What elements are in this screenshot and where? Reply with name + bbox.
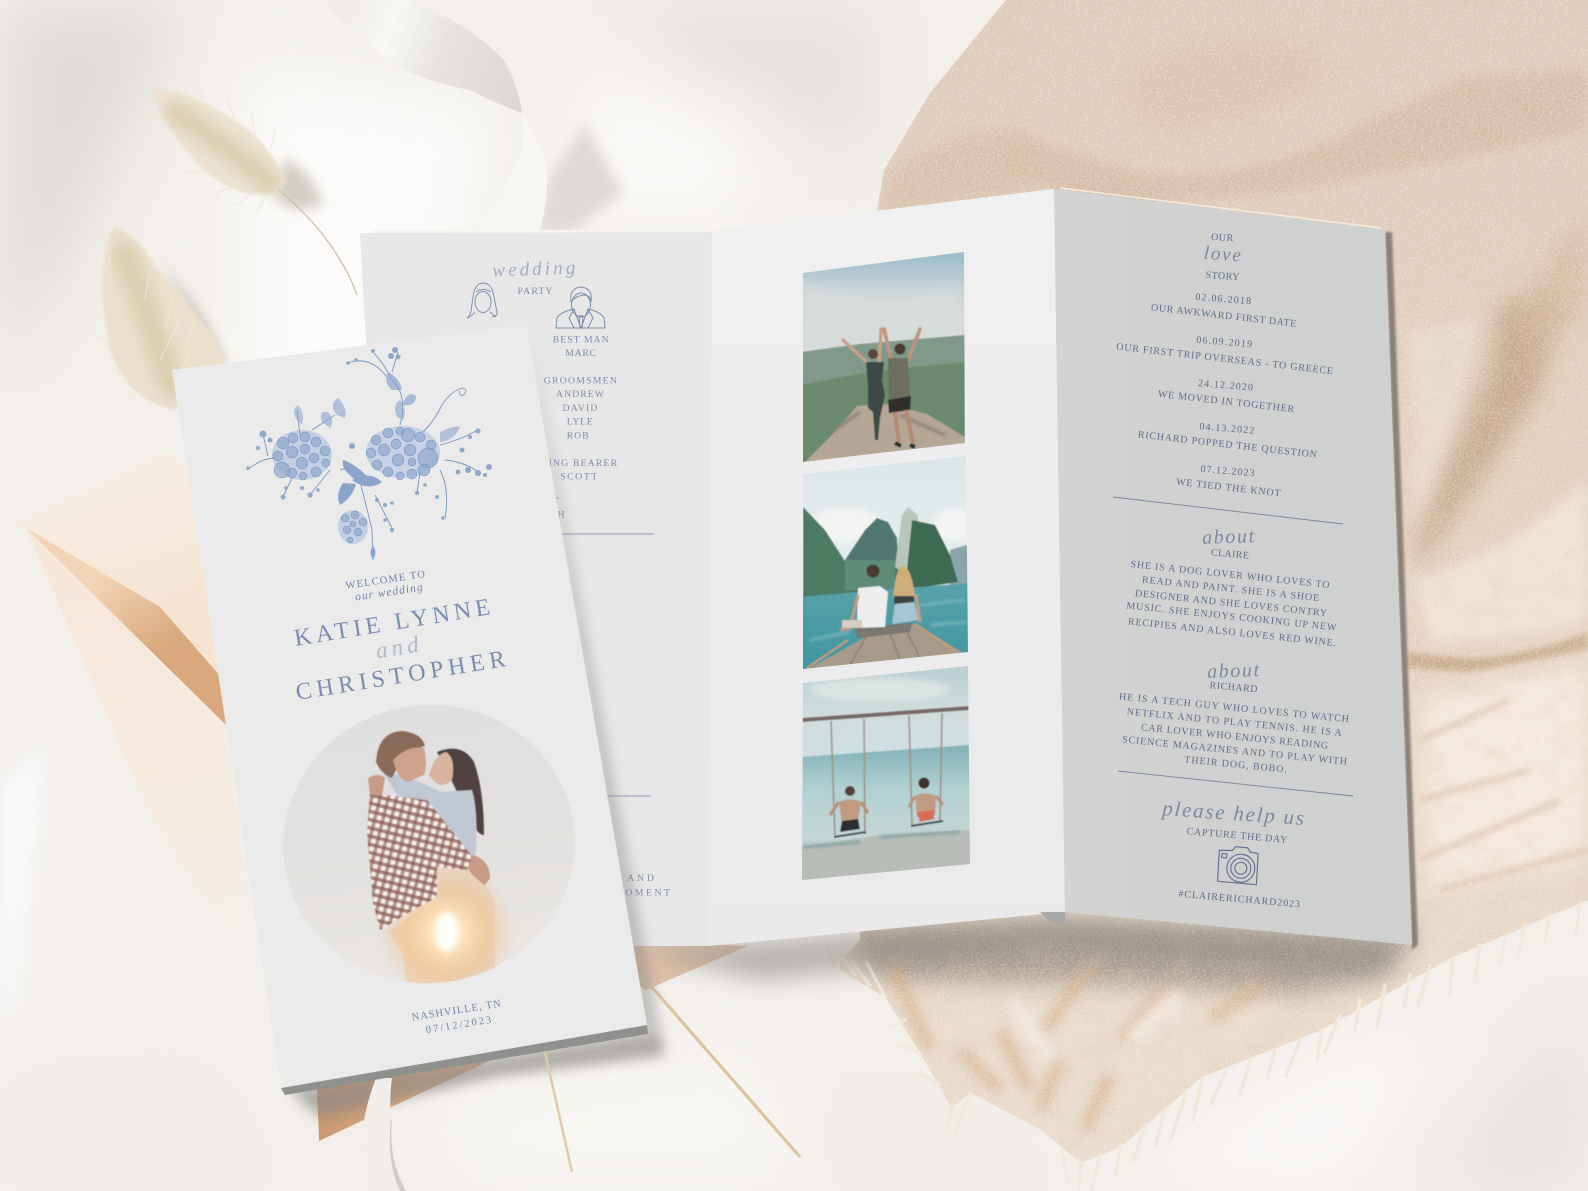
- text: wedding party names: S AND: [614, 873, 654, 884]
- photo: hikers on rock: [800, 250, 970, 465]
- script heading: wedding: wedding: [492, 258, 576, 281]
- stems on lower surface: [545, 977, 800, 1172]
- small blossoms and berries: [246, 347, 492, 532]
- photo: couple on boat: [803, 456, 968, 669]
- man hair: [376, 731, 425, 778]
- about claire: MUSIC. SHE ENJOYS COOKING UP NEW: [1126, 601, 1337, 634]
- text: couple names: [292, 594, 507, 706]
- heading: our love story: OUR: [1211, 232, 1234, 244]
- timeline dates and events: RICHARD POPPED THE QUESTION: [1137, 429, 1317, 461]
- timeline dates and events: 07.12.2023: [1200, 464, 1255, 479]
- bunny tail grass 1: [143, 74, 357, 295]
- timeline dates and events: WE TIED THE KNOT: [1175, 477, 1281, 499]
- peonies: etched blooms: [272, 426, 440, 544]
- open card: left panel wedding party: [360, 230, 712, 946]
- text: wedding party names: T: [553, 496, 559, 507]
- text: wedding party names: MARC: [565, 348, 596, 359]
- text: couple names: and: [374, 632, 421, 663]
- man on swing: [830, 786, 868, 832]
- timeline dates and events: 24.12.2020: [1198, 378, 1253, 393]
- about richard: HE IS A TECH GUY WHO LOVES TO WATCH: [1118, 691, 1349, 725]
- lower cloth under the open card: [840, 925, 1420, 995]
- woman pants: [437, 868, 495, 985]
- text: wedding party names: R: [515, 334, 522, 346]
- satin ribbon top: [324, 0, 623, 234]
- man face: [393, 748, 426, 782]
- man: [840, 564, 888, 630]
- icon: camera: [1217, 845, 1260, 885]
- satin ribbon bottom: [362, 1078, 406, 1191]
- heading: our love story: [1203, 232, 1242, 283]
- woman face: [429, 752, 453, 785]
- text: wedding party names: ANDREW: [556, 389, 605, 400]
- text: couple names: KATIE LYNNE: [292, 594, 492, 652]
- icon: groom: [556, 287, 605, 328]
- leaves: [294, 372, 460, 560]
- man pants: [387, 902, 450, 983]
- text: wedding party names: LYLE: [567, 416, 593, 428]
- text: couple names: CHRISTOPHER: [294, 646, 507, 706]
- sunlight glare: [383, 872, 511, 983]
- woman: [892, 566, 920, 624]
- open card: center panel with photos: [709, 189, 1065, 946]
- bunny tail grass 2: [88, 225, 228, 410]
- front cover card: [172, 325, 648, 1095]
- capture the day: please help us: [1160, 796, 1305, 830]
- about richard: SCIENCE MAGAZINES AND TO PLAY WITH: [1122, 734, 1348, 768]
- about richard: THEIR DOG, BOBO.: [1184, 754, 1287, 776]
- text: wedding party names: MOMENT: [614, 888, 670, 898]
- text: wedding party names: [515, 334, 670, 898]
- timeline dates and events: WE MOVED IN TOGETHER: [1157, 389, 1295, 415]
- woman: [843, 329, 885, 440]
- about richard: NETFLIX AND TO PLAY TENNIS. HE IS A: [1126, 707, 1343, 739]
- label: party: PARTY: [518, 286, 552, 297]
- photo: couple on swings: [800, 664, 972, 885]
- drop shadow: bottom cards: [290, 232, 1418, 1118]
- heading: our love story: love: [1203, 243, 1242, 266]
- about claire: SHE IS A DOG LOVER WHO LOVES TO: [1130, 559, 1330, 591]
- open card: right panel love story: [1040, 188, 1412, 945]
- timeline dates and events: 04.13.2022: [1199, 421, 1255, 437]
- cloth: peach gauze fabric: [827, 0, 1588, 1191]
- photo: couple embracing in circle: [284, 705, 574, 984]
- timeline dates and events: OUR FIRST TRIP OVERSEAS - TO GREECE: [1116, 342, 1334, 377]
- text: wedding party names: H: [557, 510, 565, 520]
- woman hair: [437, 749, 484, 835]
- text: wedding party names: SCOTT: [560, 472, 597, 482]
- cloth fringe: [827, 903, 1580, 1191]
- text: location and date: NASHVILLE, TN: [411, 998, 502, 1024]
- about claire: READ AND PAINT. SHE IS A SHOE: [1141, 575, 1320, 604]
- heading: our love story: STORY: [1205, 270, 1240, 283]
- man: [884, 329, 920, 447]
- envelope: peach paper behind card: [12, 450, 748, 1141]
- timeline dates and events: [1116, 292, 1334, 499]
- text: wedding party names: BEST MAN: [553, 334, 609, 346]
- about claire: about: [1202, 525, 1255, 549]
- about claire: RECIPIES AND ALSO LOVES RED WINE.: [1127, 616, 1336, 649]
- hands: [468, 855, 490, 885]
- about richard: about: [1207, 659, 1260, 683]
- capture the day: [1160, 796, 1305, 846]
- text: wedding party names: RING BEARER: [541, 458, 617, 469]
- text: wedding party names: GROOMSMEN: [544, 376, 617, 386]
- text: location and date: [411, 998, 502, 1036]
- woman sweater: [383, 772, 476, 860]
- text: location and date: 07/12/2023: [425, 1015, 492, 1036]
- timeline dates and events: OUR AWKWARD FIRST DATE: [1150, 302, 1297, 330]
- about claire: CLAIRE: [1211, 547, 1249, 562]
- text: wedding party names: DAVID: [562, 403, 598, 414]
- icon: bride: [467, 283, 497, 318]
- about richard: CAR LOVER WHO ENJOYS READING: [1140, 722, 1329, 752]
- woman on swing: [909, 778, 943, 822]
- about claire: DESIGNER AND SHE LOVES CONTRY: [1134, 588, 1328, 619]
- capture the day: CAPTURE THE DAY: [1186, 826, 1288, 846]
- text: welcome to our wedding: our wedding: [354, 582, 424, 603]
- text: wedding party names: ROB: [567, 430, 589, 442]
- about claire: [1126, 525, 1337, 649]
- text: welcome to our wedding: WELCOME TO: [345, 569, 426, 592]
- about richard: [1118, 659, 1349, 776]
- man shirt: plaid: [367, 793, 473, 930]
- about richard: RICHARD: [1209, 680, 1258, 695]
- hashtag: #CLAIRERICHARD2023: [1178, 889, 1300, 910]
- floral illustration: [246, 347, 492, 560]
- front card shadow on the inner panel: [528, 330, 660, 1030]
- stems and tendrils: [247, 352, 480, 560]
- text: welcome to our wedding: [345, 569, 426, 603]
- timeline dates and events: 06.09.2019: [1196, 335, 1253, 350]
- cloth folds: [840, 40, 1588, 1150]
- timeline dates and events: 02.06.2018: [1195, 292, 1252, 307]
